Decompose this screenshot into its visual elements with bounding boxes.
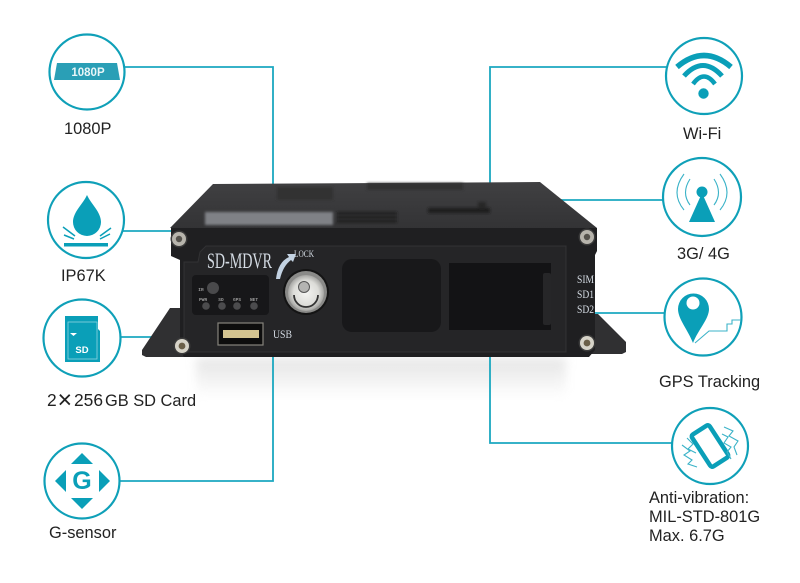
label: Anti-vibration:	[649, 489, 749, 507]
connector lines	[120, 67, 672, 481]
lock arrow	[276, 254, 296, 279]
feature: SD card	[44, 300, 196, 414]
slot labels: SIM	[577, 272, 594, 286]
label: Wi-Fi	[683, 125, 721, 143]
icon: map pin	[664, 278, 742, 356]
label: GB SD Card	[105, 392, 196, 410]
SD bay door	[449, 263, 551, 330]
model label: SD-MDVR	[207, 248, 272, 273]
corner screws	[170, 228, 596, 354]
feature: Anti-vibration	[649, 408, 760, 545]
slot labels: SD2	[577, 302, 594, 316]
mounting flanges	[142, 308, 626, 357]
slot labels: SD1	[577, 287, 594, 301]
label: MIL-STD-801G	[649, 508, 760, 526]
LED panel: IR	[198, 287, 204, 293]
icon: antenna	[663, 158, 741, 236]
icon: vibrating phone	[672, 408, 748, 484]
top face blurred markings	[205, 183, 490, 225]
top face	[170, 182, 597, 228]
feature: IP67K	[48, 182, 124, 285]
key lock	[283, 269, 329, 315]
device photo	[142, 182, 626, 357]
icon: SD card: SD	[75, 345, 89, 356]
device reflection	[196, 358, 566, 398]
USB port	[218, 323, 263, 345]
feature: 3G/4G	[663, 158, 741, 263]
blank cover	[342, 259, 441, 332]
LOCK label: LOCK	[294, 249, 314, 259]
feature: G-sensor	[44, 444, 120, 542]
LED panel: PWR	[199, 297, 207, 303]
label: Max. 6.7G	[649, 527, 725, 545]
feature: GPS	[659, 278, 760, 391]
feature: 1080P	[50, 34, 124, 138]
USB label: USB	[273, 327, 292, 341]
label	[649, 489, 760, 545]
label: 2	[47, 390, 57, 410]
LED panel	[192, 275, 269, 315]
icon: G-sensor: G	[72, 467, 92, 495]
label: 1080P	[64, 120, 111, 138]
icon: 1080P badge: 1080P	[71, 67, 105, 79]
slot labels	[577, 272, 594, 316]
icon: wifi	[666, 38, 742, 114]
label: GPS Tracking	[659, 373, 760, 391]
icon: water drop	[48, 182, 124, 258]
LED panel: GPS	[233, 297, 241, 303]
label: 256	[74, 390, 103, 410]
feature: Wi-Fi	[666, 38, 742, 143]
label: ×	[58, 386, 72, 414]
label: 3G/ 4G	[677, 245, 730, 263]
label: G-sensor	[49, 524, 117, 542]
icon: SD card	[44, 300, 120, 376]
front face	[171, 228, 597, 357]
label: IP67K	[61, 267, 106, 285]
LED panel: NET	[250, 297, 258, 303]
LED panel: SD	[218, 297, 224, 303]
